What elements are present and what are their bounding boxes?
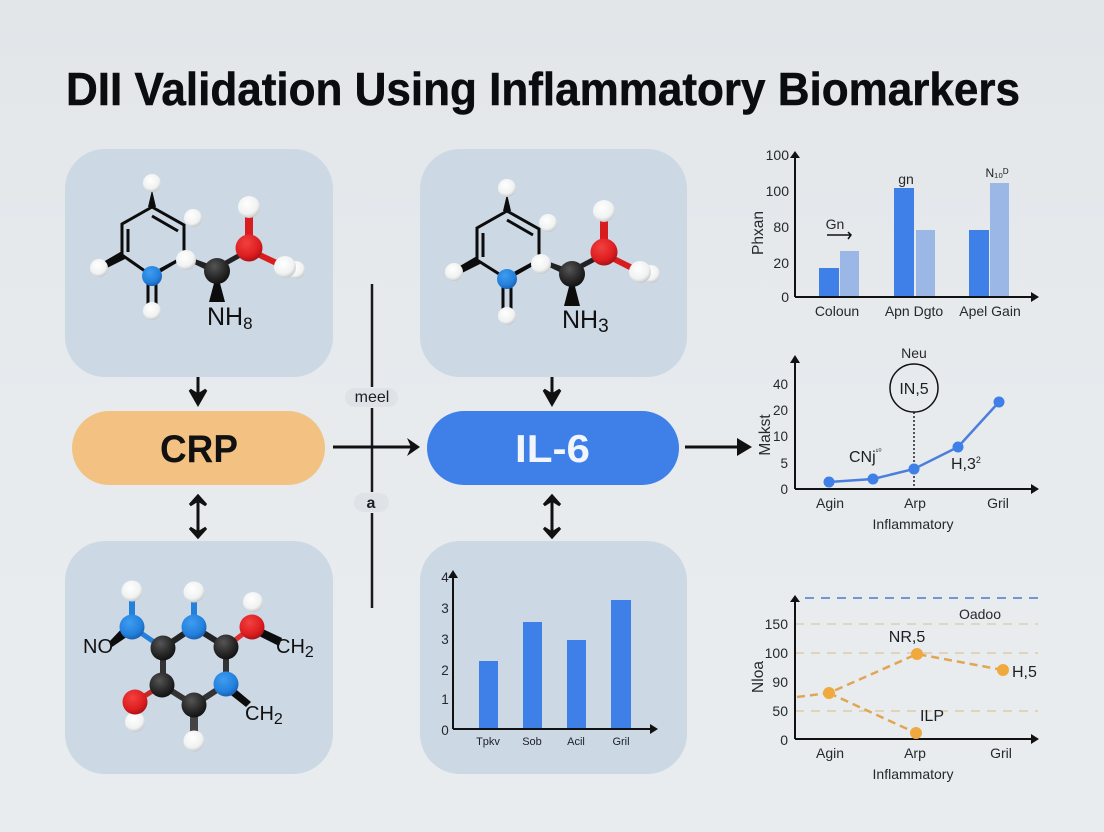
y axis labels: 0 — [780, 482, 788, 497]
y axis labels: 100 — [765, 645, 788, 661]
panel: top-middle molecule — [420, 149, 687, 377]
panel: top-left molecule — [65, 149, 333, 377]
y axis labels: 150 — [765, 616, 788, 632]
x axis labels: Gril — [612, 736, 630, 748]
y axis labels: 3 — [441, 632, 449, 647]
y axis labels: 0 — [441, 723, 449, 738]
x axis labels: Apel Gain — [959, 303, 1021, 319]
y axis labels: 20 — [773, 403, 788, 418]
axes with arrowheads — [790, 355, 1039, 494]
y axis labels — [441, 570, 449, 738]
point labels — [849, 447, 981, 473]
y axis labels: 40 — [773, 377, 788, 392]
y axis labels: 100 — [766, 183, 789, 199]
formula labels: CH — [245, 703, 274, 725]
x axis labels: Inflammatory — [873, 766, 953, 782]
x axis labels: Gril — [990, 745, 1012, 761]
x axis labels — [815, 303, 1021, 319]
x axis labels: Agin — [816, 745, 844, 761]
point labels: CNj — [849, 449, 876, 466]
chart: top-right grouped bars — [750, 147, 1039, 319]
x axis labels: Coloun — [815, 303, 859, 319]
y axis labels: 100 — [766, 147, 789, 163]
axes with arrowheads — [790, 595, 1039, 744]
point labels: ILP — [920, 708, 944, 725]
molecule bonds — [453, 194, 640, 310]
y axis labels — [765, 616, 788, 748]
callout circle: Neu — [901, 345, 927, 361]
y axis title: Makst — [757, 414, 774, 456]
axes with arrowheads — [448, 570, 658, 734]
x axis labels: Gril — [987, 495, 1009, 511]
point labels: Oadoo — [959, 606, 1001, 622]
y axis labels — [773, 377, 788, 497]
bars — [819, 183, 1009, 297]
molecule bonds — [98, 190, 285, 305]
arrow: IL-6 to charts — [685, 438, 752, 456]
axes with arrowheads — [790, 151, 1039, 302]
node: CRP: CRP — [160, 428, 238, 471]
formula labels: 2 — [274, 711, 283, 728]
y axis labels: 0 — [780, 732, 788, 748]
y axis labels: 2 — [441, 663, 449, 678]
dotted guide — [913, 412, 915, 486]
point labels: 2 — [976, 455, 981, 465]
arrow: CRP to IL-6 — [333, 438, 420, 456]
y axis labels: 90 — [772, 674, 788, 690]
x axis labels: Apn Dgto — [885, 303, 943, 319]
x axis labels — [816, 495, 1009, 532]
y axis labels: 20 — [773, 255, 789, 271]
callout circle — [890, 345, 938, 412]
molecule atoms — [120, 580, 264, 752]
formula labels: NO — [83, 636, 113, 658]
y axis labels — [766, 147, 789, 305]
annotations: Gn — [826, 216, 844, 232]
label: a — [354, 493, 389, 512]
x axis labels: Acil — [567, 736, 585, 748]
formula label: 3 — [598, 316, 609, 337]
x axis labels: Arp — [904, 745, 926, 761]
line series — [824, 396, 1004, 488]
arrow: top-left panel to CRP — [190, 377, 206, 404]
label: meel: meel — [355, 389, 389, 406]
point labels: NR,5 — [889, 629, 925, 646]
chart: bottom-right dashed line — [750, 595, 1039, 782]
point labels: ¹⁰ — [876, 447, 882, 456]
y axis labels: 4 — [441, 570, 449, 585]
x axis labels: Inflammatory — [873, 516, 953, 532]
point labels: H,3 — [951, 456, 976, 473]
line series — [797, 648, 1009, 739]
point labels — [889, 606, 1037, 725]
arrow: CRP to bottom-left panel — [190, 496, 206, 537]
node: IL-6: IL-6 — [515, 428, 590, 471]
node: CRP — [72, 411, 325, 485]
formula label: NH — [562, 306, 598, 334]
point labels: H,5 — [1012, 664, 1037, 681]
formula label: NH — [207, 303, 243, 331]
x axis labels: Arp — [904, 495, 926, 511]
title: DII Validation Using Inflammatory Biomarkers — [66, 63, 1020, 115]
y axis labels: 80 — [773, 219, 789, 235]
molecule atoms — [445, 179, 660, 325]
y axis labels: 1 — [441, 692, 449, 707]
reference lines — [795, 598, 1038, 711]
callout circle: IN,5 — [899, 381, 929, 398]
annotations: gn — [898, 171, 914, 187]
bars — [479, 600, 631, 729]
panel: bottom-left molecule — [65, 541, 333, 774]
molecule atoms — [90, 174, 305, 320]
formula labels — [83, 636, 314, 728]
label: a: a — [367, 495, 376, 512]
arrow: IL-6 to bottom-middle panel — [544, 496, 560, 537]
x axis labels: Agin — [816, 495, 844, 511]
y axis labels: 5 — [780, 456, 788, 471]
molecule bonds — [109, 595, 282, 741]
formula labels: CH — [276, 636, 305, 658]
y axis labels: 0 — [781, 289, 789, 305]
x axis labels: Sob — [522, 736, 542, 748]
y axis labels: 10 — [773, 429, 788, 444]
divider with labels — [345, 284, 398, 608]
formula label: 8 — [243, 314, 253, 333]
arrow: top-middle panel to IL-6 — [544, 377, 560, 404]
x axis labels — [816, 745, 1012, 782]
node: IL-6 — [427, 411, 679, 485]
y axis labels: 3 — [441, 601, 449, 616]
x axis labels: Tpkv — [476, 736, 500, 748]
y axis title: Nloa — [750, 661, 767, 693]
chart: middle-right line — [757, 345, 1039, 532]
annotations — [826, 166, 1009, 239]
y axis labels: 50 — [772, 703, 788, 719]
label: meel — [345, 388, 398, 407]
annotations: N₁₀ᴰ — [985, 166, 1009, 180]
x axis labels — [476, 736, 630, 748]
panel: bottom-middle bar chart — [420, 541, 687, 774]
y axis title: Phxan — [750, 211, 767, 255]
formula labels: 2 — [305, 644, 314, 661]
